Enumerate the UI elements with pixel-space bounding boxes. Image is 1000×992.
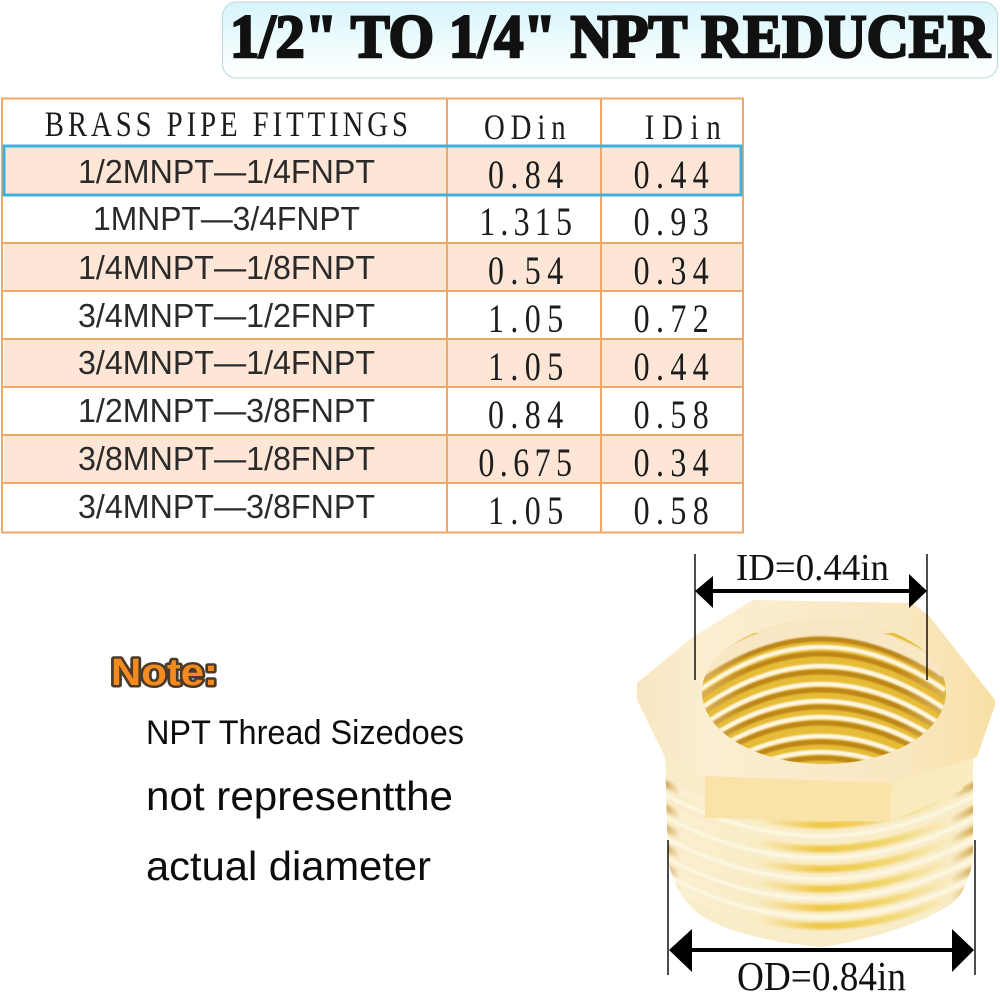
- illustration: brass reducer bushing: [637, 600, 995, 955]
- OD values column: 1.05: [488, 489, 563, 533]
- OD values column: 0.84: [488, 153, 563, 197]
- table header: BRASS PIPE FITTINGS: [45, 105, 408, 145]
- ID values column: 0.93: [634, 200, 709, 244]
- fitting names column: 3/4MNPT—1/4FNPT: [78, 344, 375, 381]
- note text: [146, 714, 464, 889]
- ID arrow: [695, 574, 927, 608]
- ID values column: 0.58: [634, 489, 709, 533]
- note text: NPT Thread Sizedoes: [146, 714, 464, 752]
- fitting names column: 3/4MNPT—3/8FNPT: [78, 488, 375, 525]
- fitting names column: 3/4MNPT—1/2FNPT: [78, 297, 375, 334]
- table row fills: [4, 146, 742, 483]
- table header: IDin: [645, 108, 721, 148]
- panel: size table: [2, 98, 743, 533]
- ID label: ID=0.44in: [736, 547, 889, 589]
- note text: actual diameter: [146, 843, 431, 889]
- title banner: [222, 2, 998, 78]
- OD arrow: [669, 929, 974, 972]
- OD values column: [478, 153, 572, 533]
- OD values column: 1.315: [479, 200, 572, 244]
- fitting names column: 1/2MNPT—3/8FNPT: [78, 392, 375, 429]
- ID values column: 0.44: [634, 345, 709, 389]
- threaded body: [665, 757, 973, 947]
- ID values column: 0.44: [634, 153, 709, 197]
- ID values column: 0.34: [634, 249, 709, 293]
- highlighted row outline: [4, 146, 741, 195]
- hex nut front face: [705, 776, 892, 822]
- hex nut top face: [637, 600, 995, 783]
- ID values column: 0.72: [634, 297, 709, 341]
- note heading: Note:: [111, 652, 218, 694]
- fitting names column: 1/4MNPT—1/8FNPT: [78, 249, 375, 286]
- OD values column: 0.54: [488, 249, 563, 293]
- hex nut right face: [890, 752, 975, 822]
- OD dimension: [668, 840, 975, 992]
- threaded bore: [702, 620, 946, 764]
- fitting names column: 3/8MNPT—1/8FNPT: [78, 440, 375, 477]
- fitting names column: [78, 153, 375, 525]
- table header: ODin: [484, 108, 566, 148]
- OD values column: 1.05: [488, 345, 563, 389]
- ID values column: 0.34: [634, 441, 709, 485]
- note text: not representthe: [146, 773, 453, 819]
- OD values column: 0.84: [488, 393, 563, 437]
- fitting names column: 1MNPT—3/4FNPT: [93, 200, 360, 237]
- ID dimension: [695, 547, 927, 680]
- ID values column: [634, 153, 709, 533]
- title text: 1/2" TO 1/4" NPT REDUCER: [230, 4, 991, 71]
- OD values column: 1.05: [488, 297, 563, 341]
- table header: [45, 105, 721, 148]
- OD values column: 0.675: [478, 441, 572, 485]
- fitting names column: 1/2MNPT—1/4FNPT: [78, 153, 375, 190]
- ID values column: 0.58: [634, 393, 709, 437]
